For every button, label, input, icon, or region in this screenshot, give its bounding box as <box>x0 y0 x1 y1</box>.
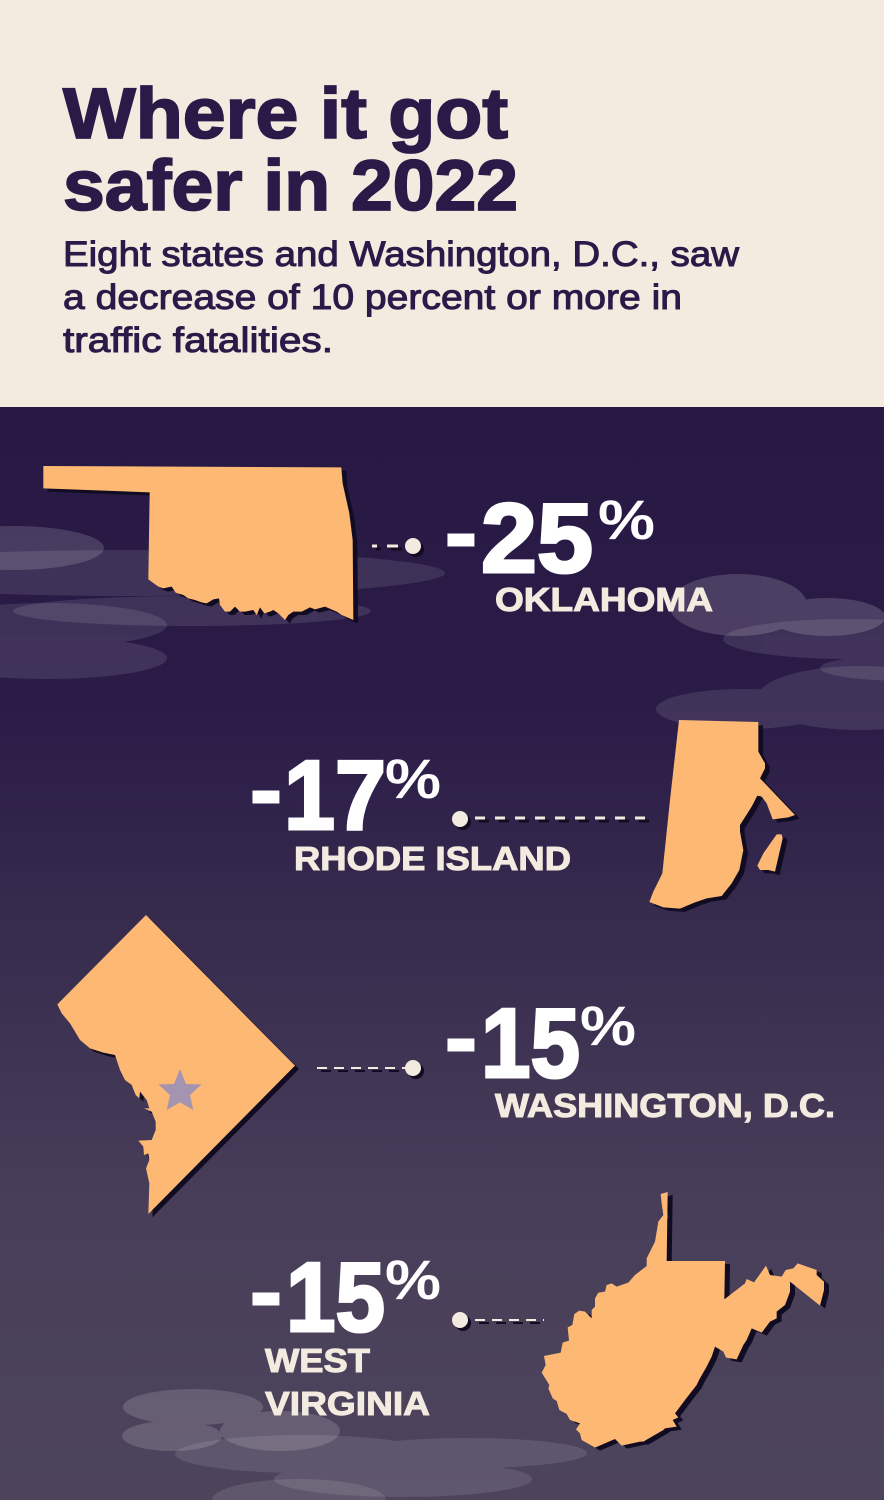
map: Oklahoma <box>43 466 358 623</box>
header panel <box>0 0 884 407</box>
subtitle text: a decrease of 10 percent or more in <box>63 278 682 317</box>
stat: West Virginia -15%: % <box>385 1248 441 1311</box>
stat: Rhode Island -17% <box>249 733 571 877</box>
stat: Rhode Island -17%: RHODE ISLAND <box>294 840 571 877</box>
stat: Rhode Island -17%: - <box>249 733 283 845</box>
stat: Washington, D.C. -15%: WASHINGTON, D.C. <box>495 1087 835 1124</box>
stat: Oklahoma -25%: 25 <box>481 483 593 593</box>
stat: Oklahoma -25% <box>444 476 713 618</box>
stat: West Virginia -15%: WEST <box>265 1342 370 1379</box>
connector: West Virginia <box>452 1312 547 1331</box>
connector: Rhode Island <box>452 811 654 830</box>
stat: West Virginia -15% <box>249 1235 441 1422</box>
dark gradient background panel <box>0 407 884 1500</box>
map: Washington, D.C. <box>57 915 299 1217</box>
stat: West Virginia -15%: - <box>249 1235 283 1347</box>
subtitle text: traffic fatalities. <box>63 321 333 360</box>
stat: Oklahoma -25%: % <box>598 488 655 551</box>
icon: capital star <box>158 1069 202 1110</box>
title <box>63 75 518 226</box>
stat: West Virginia -15%: VIRGINIA <box>265 1385 430 1422</box>
stat: Washington, D.C. -15%: - <box>444 981 478 1093</box>
connector: Washington, D.C. <box>317 1060 424 1079</box>
clouds: left of Oklahoma <box>0 526 445 679</box>
map: Rhode Island <box>649 720 800 912</box>
stat: Oklahoma -25%: OKLAHOMA <box>495 581 713 618</box>
clouds: bottom <box>122 1389 587 1500</box>
map: West Virginia <box>542 1192 829 1451</box>
stat: Oklahoma -25%: - <box>444 476 478 588</box>
stat: Washington, D.C. -15%: % <box>580 994 636 1057</box>
stat: Washington, D.C. -15%: 15 <box>481 988 580 1098</box>
connector: Oklahoma <box>372 538 424 557</box>
stat: West Virginia -15%: 15 <box>286 1242 385 1352</box>
title: Where it got <box>63 75 508 154</box>
stat: Washington, D.C. -15% <box>444 981 835 1124</box>
stat: Rhode Island -17%: 17 <box>284 740 386 850</box>
title: safer in 2022 <box>63 147 518 226</box>
subtitle text <box>63 235 740 360</box>
subtitle text: Eight states and Washington, D.C., saw <box>63 235 740 274</box>
clouds: upper right <box>656 574 884 730</box>
stat: Rhode Island -17%: % <box>385 747 441 810</box>
